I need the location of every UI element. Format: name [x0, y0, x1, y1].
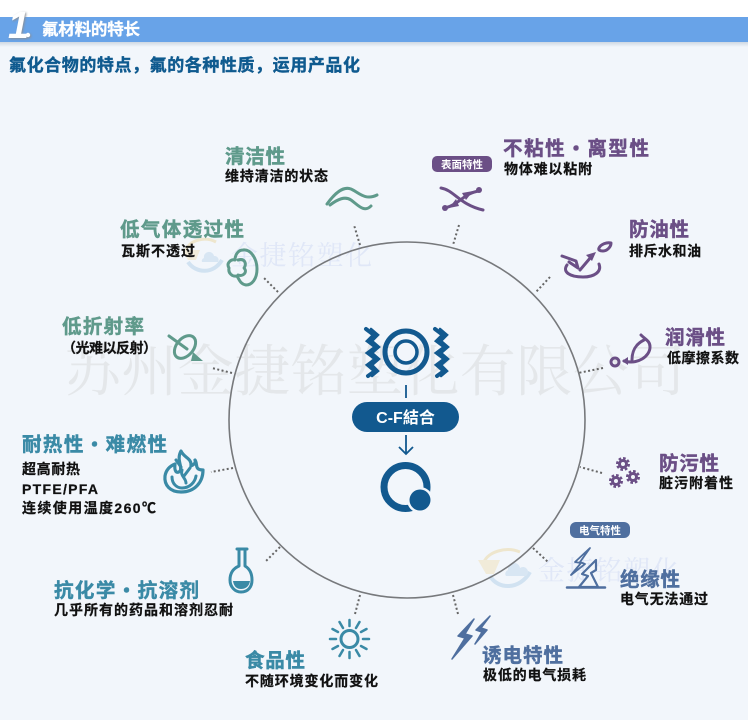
- icon: repelled droplet: [562, 243, 611, 277]
- icon: flask: [230, 549, 252, 592]
- item: low gas permeability: 瓦斯不透过: [121, 243, 195, 259]
- C-F bond pill: C-F結合: [376, 408, 435, 427]
- item: food safe: 不随环境变化而变化: [245, 673, 378, 689]
- item: chemical resistance: [54, 549, 252, 618]
- subtitle: 氟化合物的特点，氟的各种性质，运用产品化: [9, 55, 360, 75]
- item: insulation: [567, 522, 708, 607]
- tag: surface property: [432, 156, 492, 172]
- item: dielectric: 极低的电气损耗: [483, 667, 586, 683]
- item: non-stick: 物体难以粘附: [504, 161, 592, 177]
- item: heat resistance: [22, 434, 203, 516]
- item: low refractive index: [62, 316, 203, 362]
- item: chemical resistance: 几乎所有的药品和溶剂忍耐: [54, 602, 233, 618]
- item: insulation: 电气无法通过: [620, 591, 708, 607]
- item: non-stick: [432, 137, 649, 211]
- item: lubricity: [611, 326, 739, 366]
- watermark: logo upper: 金捷铭塑化: [231, 241, 372, 271]
- tag: electrical property: [570, 522, 630, 538]
- watermark: logo lower: [478, 550, 679, 586]
- icon: lightning on ground: [567, 548, 605, 588]
- icon: flame: [165, 451, 203, 492]
- item: stain resistance: [610, 452, 733, 491]
- item: stain resistance: 脏污附着性: [659, 475, 733, 491]
- item: cleanliness: [225, 146, 377, 209]
- item: food safe: 食品性: [245, 649, 305, 672]
- icon: lens with arrow: [169, 332, 203, 362]
- arrow down: [399, 435, 413, 454]
- item: heat resistance: 超高耐热: [22, 461, 80, 477]
- item: dielectric: 诱电特性: [482, 645, 563, 667]
- section number: 1: [8, 5, 29, 47]
- icon: lightning bolts: [452, 616, 490, 659]
- C-F bond pill: [352, 402, 459, 432]
- item: oil repellent: [562, 218, 701, 277]
- item: food safe: [245, 620, 378, 689]
- icon: gas cloud: [228, 250, 257, 285]
- item: heat resistance: 耐热性・难燃性: [22, 434, 167, 456]
- item: low refractive index: 低折射率: [62, 316, 144, 338]
- item: low gas permeability: 低气体透过性: [120, 219, 244, 241]
- icon: gears: [610, 458, 638, 486]
- item: oil repellent: 排斥水和油: [629, 243, 701, 259]
- icon: crossing arrows: [441, 187, 483, 211]
- item: non-stick: 不粘性・离型性: [503, 137, 649, 160]
- center icon: vibrating bond: [366, 329, 448, 376]
- header band: 氟材料的特长: [42, 20, 140, 39]
- icon: lubrication drop: [611, 335, 650, 366]
- connector line: [405, 385, 407, 398]
- item: insulation: 绝缘性: [620, 568, 680, 591]
- item: low gas permeability: [120, 219, 257, 285]
- center icon: atom ring: [384, 466, 433, 513]
- item: cleanliness: 清洁性: [225, 146, 285, 168]
- watermark: company name: 苏州金捷铭塑化有限公司: [65, 342, 685, 404]
- central circle: [229, 242, 585, 598]
- item: dielectric: [452, 616, 586, 683]
- icon: waves: [327, 188, 377, 209]
- item: oil repellent: 防油性: [629, 218, 689, 241]
- tag: surface property: 表面特性: [441, 158, 483, 171]
- item: lubricity: 润滑性: [665, 326, 725, 349]
- item: lubricity: 低摩擦系数: [667, 350, 739, 366]
- tag: electrical property: 电气特性: [579, 524, 621, 537]
- watermark: logo lower: 金捷铭塑化: [538, 556, 679, 586]
- header band: [0, 5, 748, 47]
- icon: sun: [330, 620, 369, 658]
- item: cleanliness: 维持清洁的状态: [225, 168, 328, 184]
- watermark: logo upper: [182, 239, 372, 271]
- item: low refractive index: （光难以反射）: [62, 340, 157, 356]
- dotted connectors: [211, 225, 603, 614]
- item: chemical resistance: 抗化学・抗溶剂: [54, 579, 199, 602]
- item: heat resistance: 连续使用温度260℃: [22, 500, 156, 516]
- item: stain resistance: 防污性: [659, 452, 719, 475]
- item: heat resistance: PTFE/PFA: [22, 481, 98, 497]
